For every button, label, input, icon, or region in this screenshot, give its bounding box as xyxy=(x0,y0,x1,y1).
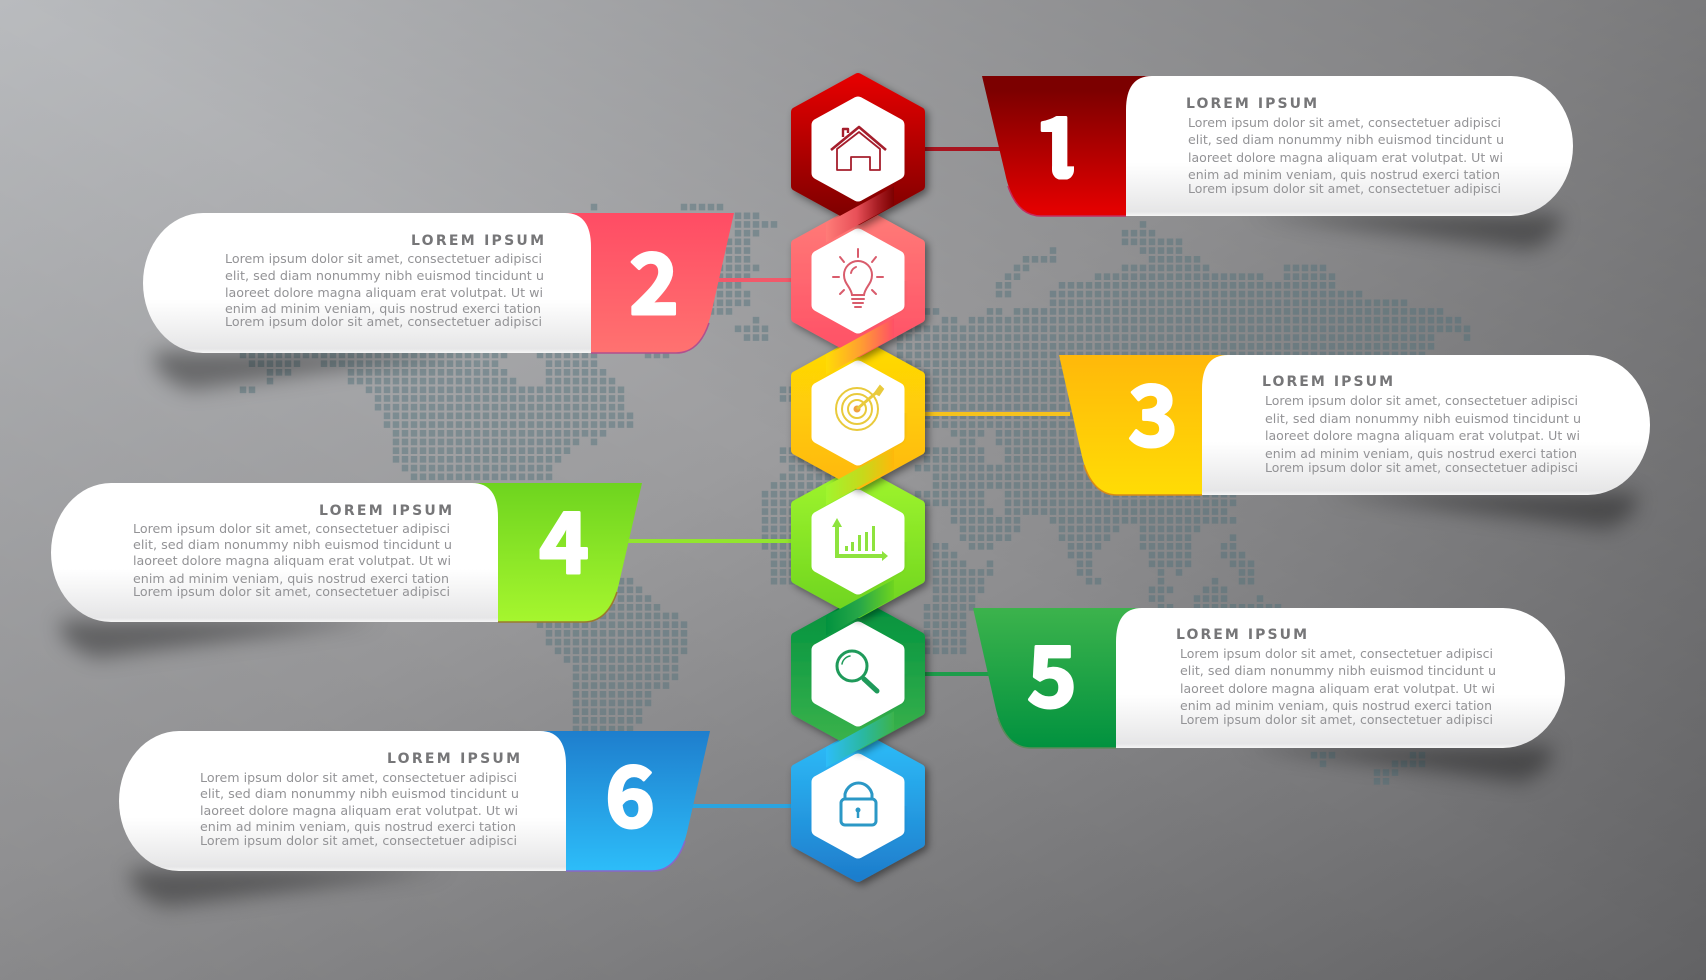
number 2: 2 xyxy=(629,218,679,339)
card 5 xyxy=(1116,608,1565,748)
body text 2: enim ad minim veniam, quis nostrud exerci tation xyxy=(225,301,541,316)
icon: magnifier xyxy=(837,651,877,691)
number 3: 3 xyxy=(1128,350,1178,471)
body text 6 xyxy=(200,770,519,848)
body text 2: laoreet dolore magna aliquam erat volutpat. Ut wi xyxy=(225,285,543,300)
heading 1: LOREM IPSUM xyxy=(1186,96,1317,112)
body text 1: Lorem ipsum dolor sit amet, consectetuer adipisci xyxy=(1188,181,1501,196)
tab 3 xyxy=(1059,355,1232,495)
body text 5: Lorem ipsum dolor sit amet, consectetuer adipisci xyxy=(1180,712,1493,727)
hexagon 5: magnifier xyxy=(796,603,920,745)
number 1: 1 xyxy=(1033,82,1083,203)
body text 4: laoreet dolore magna aliquam erat volutpat. Ut wi xyxy=(133,553,451,568)
body text 6: Lorem ipsum dolor sit amet, consectetuer adipisci xyxy=(200,770,517,785)
card 6 xyxy=(119,731,566,871)
body text 2: elit, sed diam nonummy nibh euismod tincidunt u xyxy=(225,268,544,283)
body text 4: elit, sed diam nonummy nibh euismod tincidunt u xyxy=(133,537,452,552)
body text 1: Lorem ipsum dolor sit amet, consectetuer adipisci xyxy=(1188,115,1501,130)
tab 5 xyxy=(973,608,1146,748)
body text 2: Lorem ipsum dolor sit amet, consectetuer adipisci xyxy=(225,251,542,266)
number 4: 4 xyxy=(539,477,589,598)
body text 5: laoreet dolore magna aliquam erat volutpat. Ut wi xyxy=(1180,681,1495,696)
panel 2 xyxy=(143,213,734,353)
body text 5: enim ad minim veniam, quis nostrud exerci tation xyxy=(1180,698,1492,713)
card 1 xyxy=(1126,76,1573,216)
body text 5 xyxy=(1180,646,1496,727)
card 4 xyxy=(51,483,498,622)
panel 3 xyxy=(1059,350,1650,495)
body text 5: elit, sed diam nonummy nibh euismod tincidunt u xyxy=(1180,663,1496,678)
hexagon 3: target xyxy=(796,342,920,484)
panel 1 xyxy=(982,76,1573,216)
body text 1 xyxy=(1188,115,1504,196)
hexagon 6: lock xyxy=(796,735,920,877)
body text 4: Lorem ipsum dolor sit amet, consectetuer adipisci xyxy=(133,584,450,599)
body text 3: enim ad minim veniam, quis nostrud exerci tation xyxy=(1265,446,1577,461)
connector lines xyxy=(625,149,1070,806)
body text 6: elit, sed diam nonummy nibh euismod tincidunt u xyxy=(200,786,519,801)
body text 2: Lorem ipsum dolor sit amet, consectetuer adipisci xyxy=(225,314,542,329)
panel shadows xyxy=(60,214,1637,907)
tab 2 xyxy=(561,213,734,353)
body text 4 xyxy=(133,521,452,599)
number 6: 6 xyxy=(605,731,655,852)
panel 4 xyxy=(51,477,642,622)
body text 3: Lorem ipsum dolor sit amet, consectetuer adipisci xyxy=(1265,460,1578,475)
body text 5: Lorem ipsum dolor sit amet, consectetuer adipisci xyxy=(1180,646,1493,661)
icon: bar chart with arrows xyxy=(832,518,888,561)
body text 6: laoreet dolore magna aliquam erat volutpat. Ut wi xyxy=(200,803,518,818)
hexagon 1: house xyxy=(796,78,920,220)
body text 3: laoreet dolore magna aliquam erat volutpat. Ut wi xyxy=(1265,428,1580,443)
panel 5 xyxy=(973,608,1565,748)
heading 4: LOREM IPSUM xyxy=(319,503,452,519)
number 5: 5 xyxy=(1027,611,1077,732)
body text 1: elit, sed diam nonummy nibh euismod tincidunt u xyxy=(1188,132,1504,147)
heading 5: LOREM IPSUM xyxy=(1176,627,1307,643)
body text 3 xyxy=(1265,393,1581,475)
icon: light bulb xyxy=(833,249,883,307)
body text 3: Lorem ipsum dolor sit amet, consectetuer adipisci xyxy=(1265,393,1578,408)
heading 6: LOREM IPSUM xyxy=(387,751,520,767)
icon: padlock xyxy=(841,783,876,825)
body text 2 xyxy=(225,251,544,329)
icon: target with arrow xyxy=(836,386,883,430)
hexagon 2: light bulb xyxy=(796,210,920,352)
card 3 xyxy=(1202,355,1650,495)
card 2 xyxy=(143,213,591,353)
body text 6: enim ad minim veniam, quis nostrud exerci tation xyxy=(200,819,516,834)
body text 1: enim ad minim veniam, quis nostrud exerci tation xyxy=(1188,167,1500,182)
body text 6: Lorem ipsum dolor sit amet, consectetuer adipisci xyxy=(200,833,517,848)
body text 4: enim ad minim veniam, quis nostrud exerci tation xyxy=(133,571,449,586)
body text 3: elit, sed diam nonummy nibh euismod tincidunt u xyxy=(1265,411,1581,426)
body text 1: laoreet dolore magna aliquam erat volutpat. Ut wi xyxy=(1188,150,1503,165)
tab 6 xyxy=(536,731,710,871)
dotted world map xyxy=(240,207,1473,781)
icon: house xyxy=(831,127,886,170)
tab 4 xyxy=(468,483,642,622)
panel 6 xyxy=(119,731,710,871)
heading 2: LOREM IPSUM xyxy=(411,233,544,249)
ribbon links between hexagons xyxy=(826,186,894,768)
body text 4: Lorem ipsum dolor sit amet, consectetuer adipisci xyxy=(133,521,450,536)
heading 3: LOREM IPSUM xyxy=(1262,374,1393,390)
tab 1 xyxy=(982,76,1156,216)
hexagon 4: chart xyxy=(796,471,920,613)
